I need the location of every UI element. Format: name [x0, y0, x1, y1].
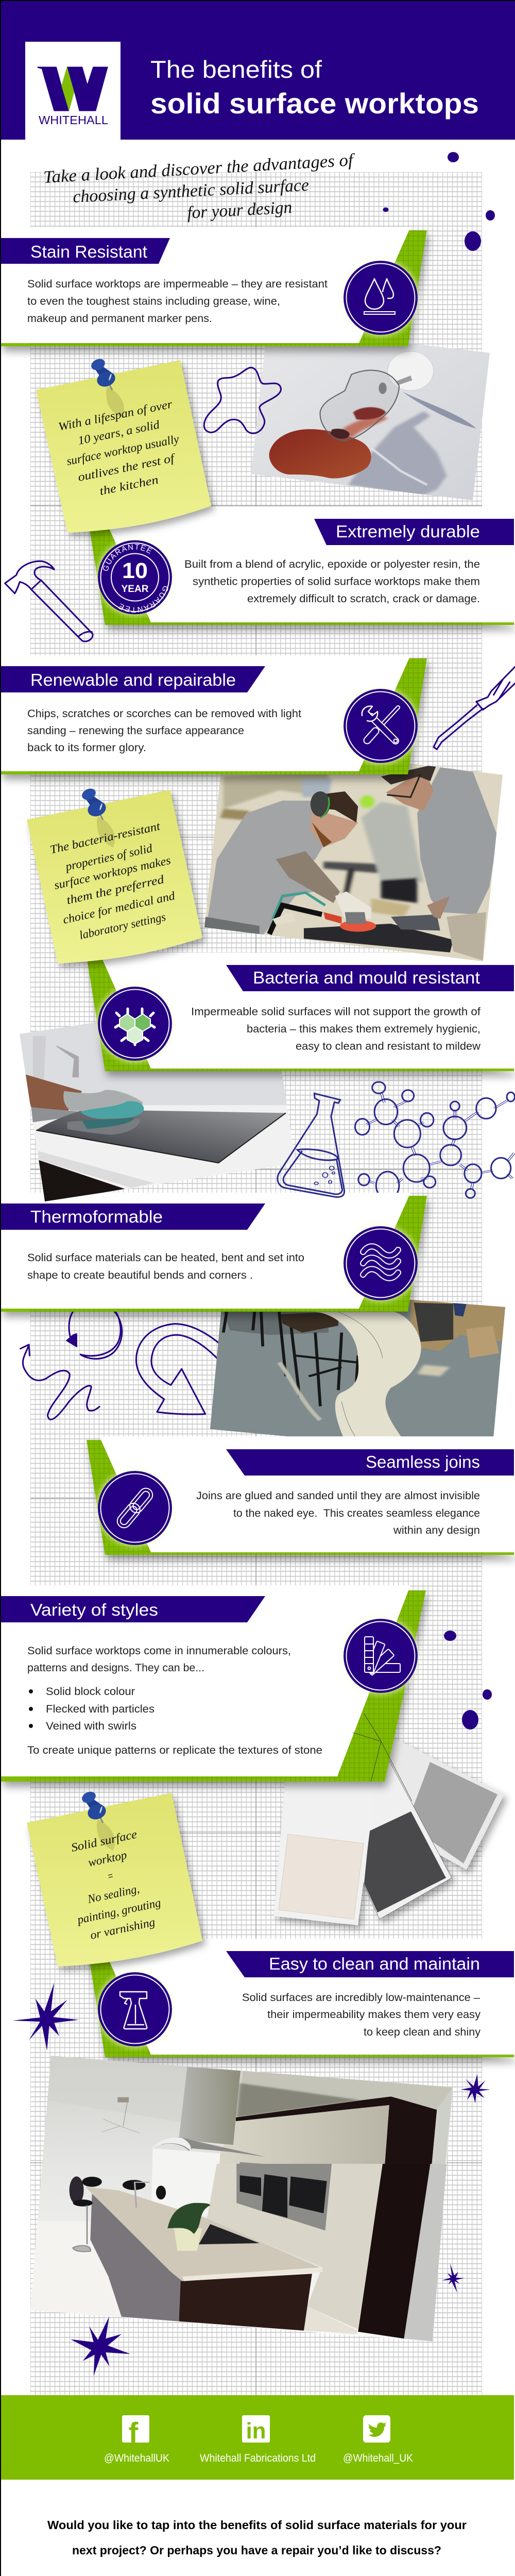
body text	[242, 1992, 481, 2038]
note text: laboratory settings	[78, 910, 167, 942]
body text: Built from a blend of acrylic, epoxide or polyester resin, the	[184, 558, 480, 570]
heading	[314, 519, 514, 545]
card shape	[1, 1193, 427, 1312]
icon: facebook: f	[129, 2416, 139, 2449]
doodle: flask	[278, 1093, 345, 1197]
body text: patterns and designs. They can be...	[27, 1662, 204, 1674]
doodle: hammer	[5, 561, 93, 641]
photo: cleaning a hob	[20, 1022, 296, 1201]
icon: linkedin	[242, 2415, 270, 2444]
icon: bacteria	[98, 987, 172, 1061]
photo: spilled wine glass	[251, 343, 490, 500]
card shape	[1, 655, 427, 774]
note text: With a lifespan of over	[57, 397, 174, 433]
card shape	[87, 953, 514, 1071]
body text: their impermeability makes them very easy	[267, 2009, 481, 2021]
heading: Renewable and repairable	[30, 670, 236, 689]
intro handwritten text: choosing a synthetic solid surface	[73, 176, 310, 207]
icon: colour fan	[344, 1619, 418, 1693]
icon: heat waves	[344, 1226, 418, 1300]
body text: to keep clean and shiny	[364, 2026, 481, 2038]
heading	[226, 1449, 514, 1476]
body text: makeup and permanent marker pens.	[27, 313, 212, 325]
body text: within any design	[393, 1524, 480, 1536]
note text: painting, grouting	[75, 1896, 162, 1926]
title	[150, 56, 479, 120]
heading: Seamless joins	[366, 1452, 480, 1471]
ink splats mid	[444, 1631, 492, 1730]
icon: twitter	[363, 2415, 390, 2443]
social footer band	[1, 2395, 514, 2480]
note text	[49, 820, 176, 942]
sticky note: bacteria resistant	[27, 787, 202, 963]
icon: 10 year guarantee badge: GUARANTEE	[103, 544, 152, 571]
sticky note: no sealing	[27, 1790, 202, 1967]
title: solid surface worktops	[150, 87, 479, 120]
note text: No sealing,	[86, 1882, 141, 1906]
doodle: star bottom	[71, 2317, 130, 2376]
heading	[1, 666, 265, 692]
note text	[57, 397, 180, 498]
note text	[70, 1827, 162, 1942]
panel: renewable and repairable	[1, 655, 427, 774]
panel: stain resistant	[1, 227, 427, 346]
note text: surface worktops makes	[53, 854, 172, 892]
social handles: @WhitehallUK	[104, 2452, 169, 2464]
note text: Solid surface	[70, 1827, 138, 1854]
body text: Chips, scratches or scorches can be removed with light	[27, 708, 301, 720]
call to action question: Would you like to tap into the benefits of solid surface materials for your	[47, 2518, 467, 2532]
body text: synthetic properties of solid surface worktops make them	[193, 576, 480, 587]
heading: Extremely durable	[336, 522, 480, 541]
heading	[226, 965, 514, 991]
bullet list: Solid block colour	[46, 1686, 135, 1698]
card shape	[87, 506, 514, 625]
swatch outlines over green	[353, 1714, 412, 1801]
panel: seamless joins	[87, 1436, 514, 1555]
doodle: curved arrows	[21, 1309, 220, 1419]
icon: wrench and screwdriver	[344, 689, 418, 763]
logo block: WHITEHALL	[39, 113, 108, 127]
body text: Joins are glued and sanded until they are almost invisible	[196, 1490, 480, 1502]
body text	[27, 1645, 291, 1674]
ink splats top	[383, 152, 495, 251]
panel: extremely durable	[87, 506, 515, 636]
icon: push pin	[80, 1790, 115, 1851]
social handles	[104, 2452, 413, 2464]
body text	[27, 1252, 304, 1281]
photo: curved thermoformed panel	[210, 1299, 505, 1436]
note text: surface worktop usually	[65, 432, 180, 468]
panel: variety of styles	[1, 1585, 426, 1801]
header band	[1, 1, 515, 140]
title: The benefits of	[150, 56, 322, 83]
note text: worktop	[87, 1849, 128, 1869]
heading	[1, 1596, 265, 1622]
icon: water drops	[344, 261, 418, 335]
body text: sanding – renewing the surface appearance	[27, 725, 244, 737]
icon: linkedin: in	[246, 2418, 266, 2444]
body text: easy to clean and resistant to mildew	[296, 1041, 481, 1052]
intro handwritten text: Take a look and discover the advantages of	[43, 150, 356, 187]
icon: spray bottle	[98, 1972, 172, 2046]
body text: bacteria – this makes them extremely hygienic,	[247, 1023, 480, 1035]
card shape	[1, 227, 427, 346]
photo: workers sanding a worktop	[204, 764, 503, 961]
swatch: cream marble	[274, 1726, 381, 1925]
doodle: star left	[12, 1982, 79, 2050]
doodle: screwdriver	[434, 667, 515, 749]
swatch: dark fleck	[355, 1714, 452, 1919]
body text	[196, 1490, 480, 1536]
icon: chain link	[98, 1471, 172, 1545]
social handles: @Whitehall_UK	[343, 2452, 413, 2464]
card shape	[87, 1436, 514, 1555]
call to action question	[47, 2518, 467, 2557]
body text: shape to create beautiful bends and corners .	[27, 1269, 253, 1281]
body text: extremely difficult to scratch, crack or damage.	[247, 593, 480, 605]
icon: facebook	[122, 2415, 149, 2449]
doodle: splat outline	[204, 367, 281, 433]
note text: properties of solid	[63, 841, 154, 873]
photo: modern kitchen with solid surface island	[26, 2053, 458, 2347]
heading	[1, 238, 170, 264]
doodle: molecule	[355, 1082, 514, 1199]
note text: =	[106, 1869, 115, 1883]
doodle: star right upper	[461, 2074, 490, 2104]
icon: 10 year guarantee badge: 10	[122, 558, 148, 583]
bullet list: Flecked with particles	[46, 1703, 154, 1715]
note text: 10 years, a solid	[77, 418, 161, 447]
body text: Solid surface worktops come in innumerable colours,	[27, 1645, 291, 1657]
intro handwritten text: for your design	[186, 198, 293, 223]
card shape	[87, 1939, 514, 2057]
graph paper grid background	[30, 172, 482, 2395]
material swatches	[274, 1714, 504, 1925]
body text: Impermeable solid surfaces will not support the growth of	[191, 1006, 480, 1018]
doodle: star right lower	[442, 2263, 464, 2293]
body text: Solid surface worktops are impermeable – they are resistant	[27, 278, 328, 290]
icon: push pin	[80, 787, 115, 848]
icon: 10 year guarantee badge: GUARANTEE	[118, 586, 168, 613]
panel: thermoformable	[1, 1193, 427, 1312]
panel: bacteria and mould resistant	[87, 953, 514, 1071]
body text: to the naked eye. This creates seamless elegance	[233, 1507, 480, 1519]
swatch: grey	[374, 1728, 504, 1870]
heading	[1, 1204, 265, 1230]
note text: outlives the rest of	[77, 451, 177, 484]
intro handwritten text	[43, 150, 356, 223]
note text: or varnishing	[89, 1916, 156, 1942]
bullet list: Veined with swirls	[46, 1720, 136, 1732]
social handles: Whitehall Fabrications Ltd	[200, 2452, 316, 2464]
body text	[27, 278, 328, 325]
sticky note: lifespan	[36, 357, 211, 533]
body text	[27, 708, 301, 754]
body text	[191, 1006, 481, 1052]
body text: Solid surface materials can be heated, bent and set into	[27, 1252, 304, 1264]
heading: Thermoformable	[30, 1207, 163, 1226]
body text: back to its former glory.	[27, 742, 146, 754]
heading: Variety of styles	[30, 1600, 158, 1619]
icon: 10 year guarantee badge: YEAR	[122, 584, 149, 595]
logo block	[25, 42, 121, 140]
body text	[184, 558, 480, 605]
icon: 10 year guarantee badge	[94, 537, 175, 620]
body text: to even the toughest stains including grease, wine,	[27, 296, 280, 307]
panel: easy to clean and maintain	[87, 1939, 514, 2057]
note text: choice for medical and	[62, 889, 176, 926]
closing text: To create unique patterns or replicate the textures of stone	[27, 1744, 322, 1756]
heading: Stain Resistant	[30, 242, 147, 261]
heading	[226, 1951, 514, 1977]
note text: the kitchen	[98, 473, 160, 498]
heading: Easy to clean and maintain	[269, 1954, 480, 1973]
note text: The bacteria-resistant	[49, 820, 162, 856]
bullet list	[29, 1686, 154, 1732]
card shape	[1, 1585, 426, 1782]
body text: Solid surfaces are incredibly low-maintenance –	[242, 1992, 480, 2004]
note text: them the preferred	[65, 873, 165, 907]
icon: push pin	[90, 357, 124, 418]
heading: Bacteria and mould resistant	[253, 968, 480, 987]
call to action question: next project? Or perhaps you have a repair you’d like to discuss?	[72, 2544, 441, 2557]
